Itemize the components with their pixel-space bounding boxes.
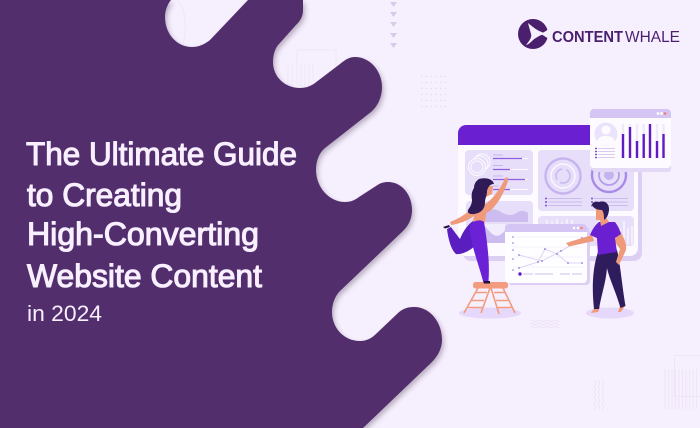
avatar [594, 122, 618, 146]
purple wavy blob panel [0, 0, 442, 428]
woman on stool [443, 177, 521, 318]
title [26, 136, 297, 326]
logo wordmark: Whale: WHALE [625, 29, 680, 46]
title: in 2024 [27, 301, 102, 326]
decorative wavy lines [531, 320, 604, 410]
line chart card [505, 224, 590, 285]
raised shoe [443, 225, 450, 228]
bar chart [623, 124, 664, 158]
stool [464, 282, 515, 314]
arms and torso [450, 177, 508, 225]
legs [447, 221, 480, 254]
title: The Ultimate Guide [26, 136, 297, 172]
title: to Creating [27, 177, 182, 213]
decorative dot grid [421, 76, 446, 106]
trousers [593, 250, 626, 309]
title: High-Converting [27, 216, 259, 252]
chart lines [512, 236, 583, 271]
chart legend [518, 272, 582, 276]
title: Website Content [27, 258, 262, 294]
logo icon: whale tail [518, 19, 549, 49]
profile stats card [590, 109, 671, 172]
shirt [590, 222, 621, 255]
dashboard illustration [443, 109, 671, 318]
man pointing [566, 201, 634, 318]
arms [566, 231, 626, 265]
face [486, 186, 493, 197]
main dashboard window [458, 125, 642, 261]
head [596, 207, 609, 226]
shoe [483, 281, 490, 284]
logo: Content Whale [518, 19, 680, 49]
decorative faint outlines in notch [178, 0, 336, 88]
panel: bar chart [538, 216, 634, 246]
decorative triangles [390, 2, 397, 48]
man shadow [586, 308, 634, 318]
logo wordmark: Content: CONTENT [552, 29, 623, 46]
decorative line chart outline [665, 356, 700, 409]
feet [591, 306, 625, 313]
stool shadow [459, 308, 521, 318]
hair [592, 201, 609, 220]
panel: finance stats [465, 150, 533, 195]
panel: ring charts [538, 150, 634, 211]
panel: area chart [466, 201, 533, 243]
hair [468, 178, 494, 214]
